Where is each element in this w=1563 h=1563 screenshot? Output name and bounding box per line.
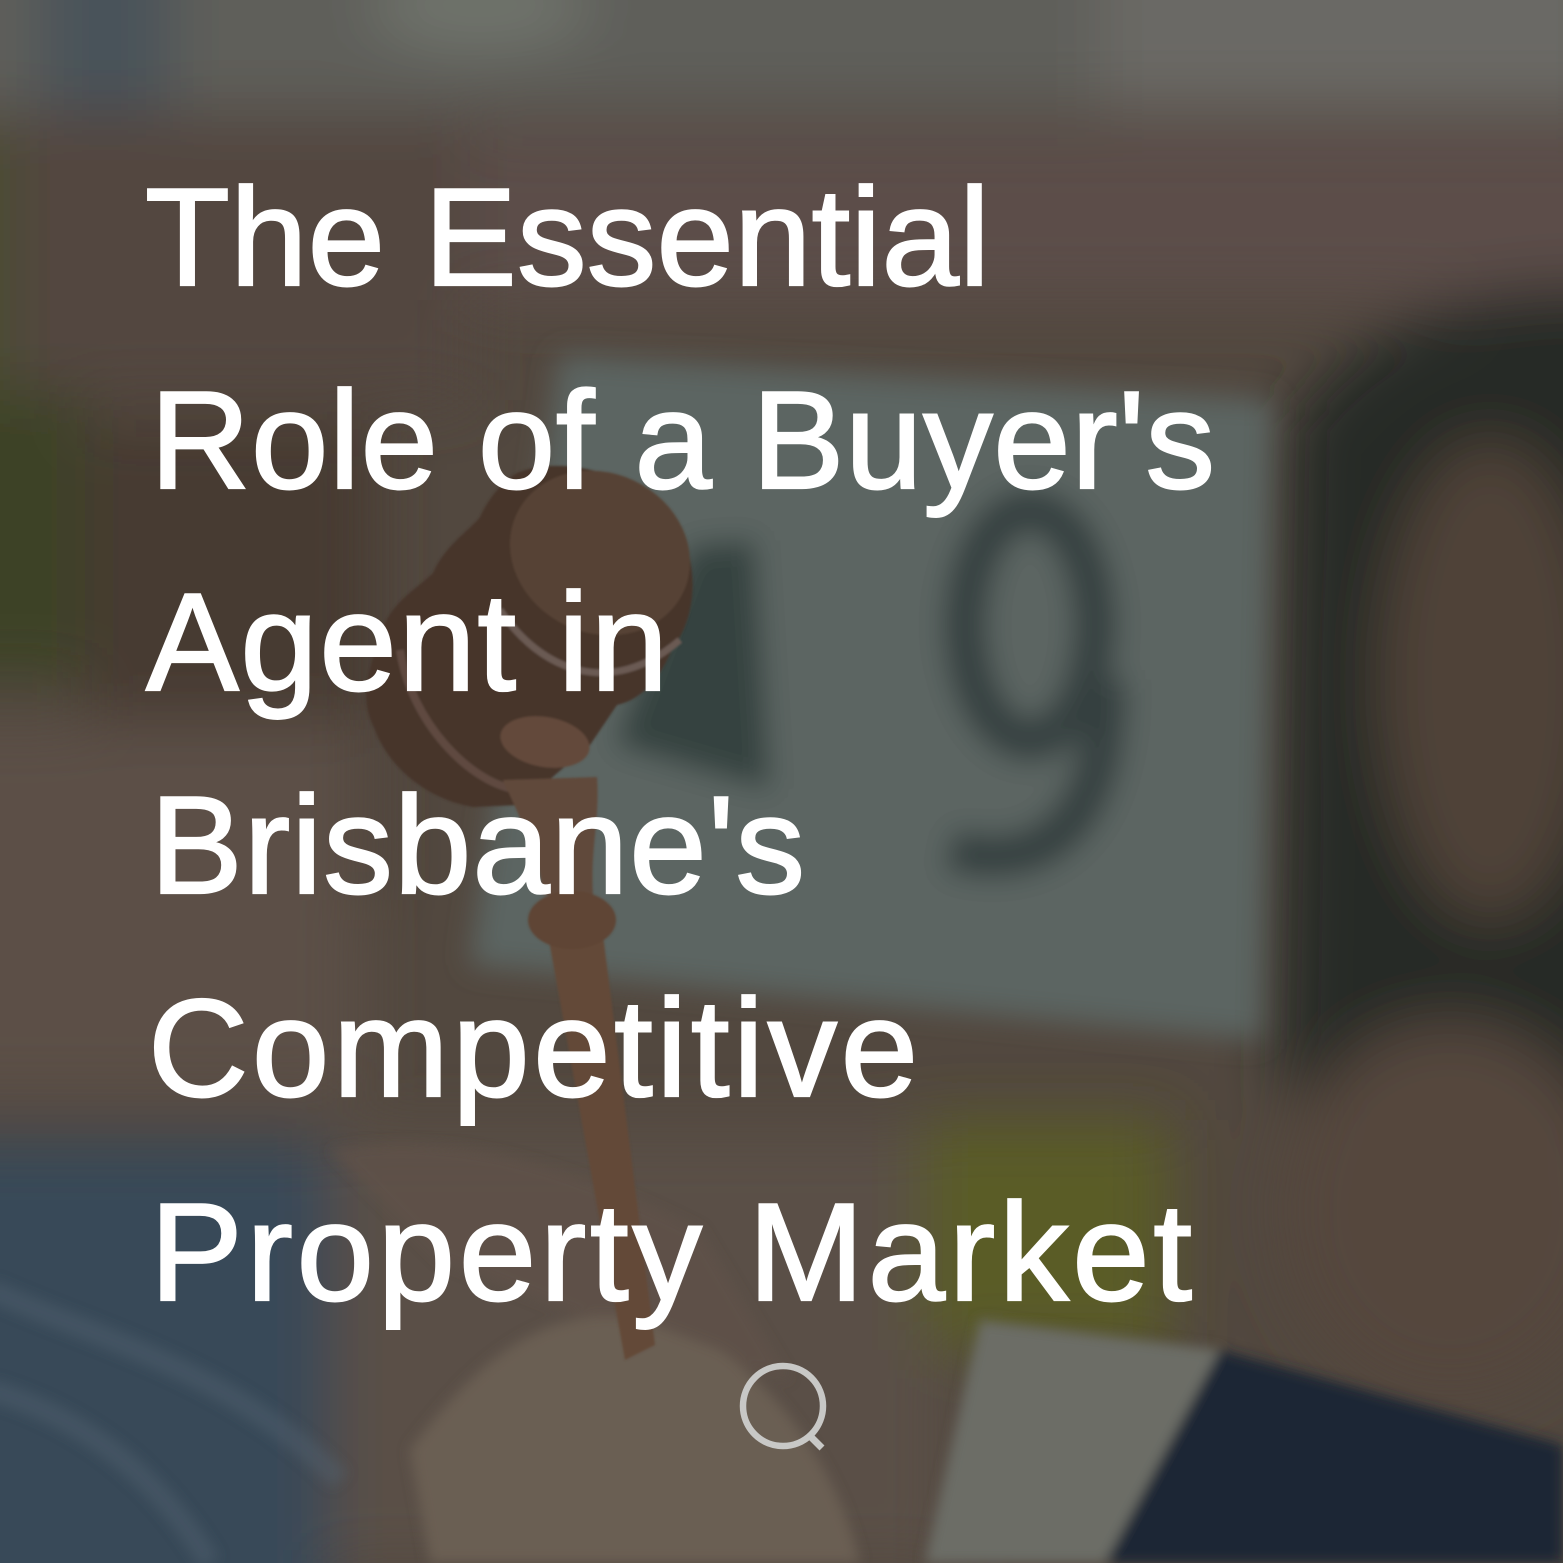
title: Property Market bbox=[150, 1175, 1192, 1330]
gavel bbox=[366, 442, 717, 1360]
title: Agent in bbox=[146, 565, 668, 720]
icon: Q logo bbox=[743, 1366, 823, 1448]
title: The Essential bbox=[145, 160, 990, 315]
title bbox=[145, 160, 1215, 1330]
title: Role of a Buyer's bbox=[150, 363, 1215, 518]
title: Competitive bbox=[148, 971, 918, 1126]
hand, cuff and suit bbox=[0, 1144, 1563, 1563]
title: Brisbane's bbox=[150, 768, 805, 923]
bidding card bbox=[470, 355, 1272, 1040]
